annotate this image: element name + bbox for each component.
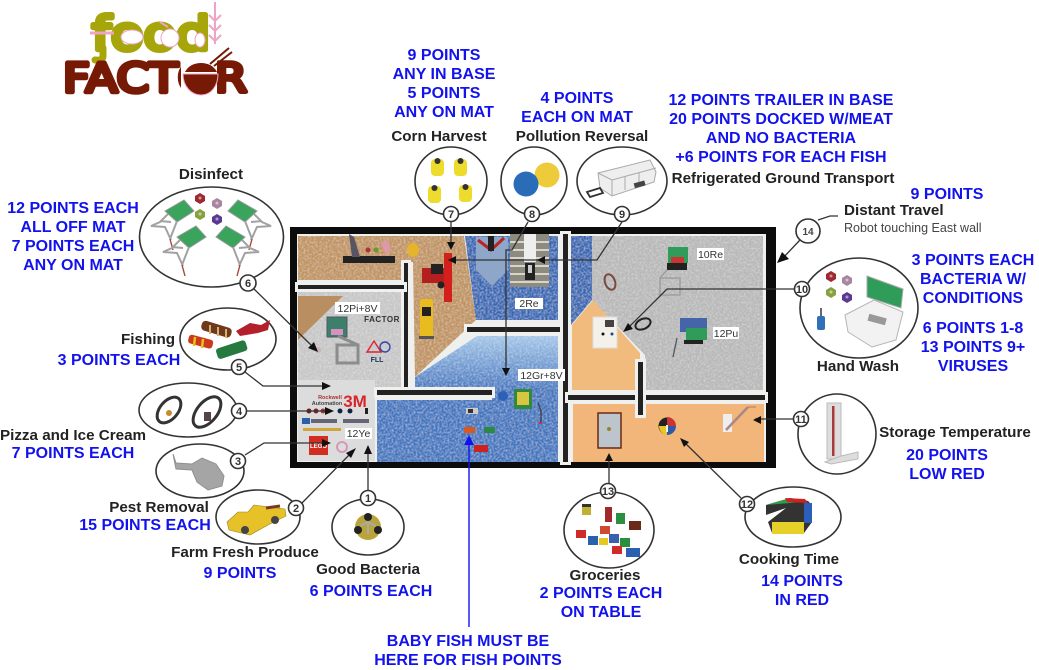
text: disinfect score: 12 POINTS EACH: [7, 200, 139, 217]
sponsor logos: LEGO: [310, 444, 327, 450]
callout 9: refrigerated ground transport: [577, 147, 667, 222]
text: hand wash score: 13 POINTS 9+: [921, 339, 1025, 356]
label: hand wash: Hand Wash: [817, 358, 899, 375]
yellow truck: [419, 299, 434, 339]
badge 11: 11: [795, 414, 807, 426]
callout 1: good bacteria: [332, 490, 404, 555]
rat figure: [173, 454, 224, 490]
field labels: 10Re: [698, 249, 723, 261]
badge 6: 6: [245, 278, 251, 290]
text: cooking score: IN RED: [775, 592, 829, 609]
sponsor logos: 3M: [343, 392, 367, 411]
callout 13: groceries: [564, 484, 654, 568]
callout 8: pollution reversal: [501, 147, 567, 222]
label: disinfect: Disinfect: [179, 166, 243, 183]
text: hand wash score: 6 POINTS 1-8: [923, 320, 1023, 337]
sponsor logos: Rockwell: [318, 395, 342, 401]
baby fish arrow: [464, 435, 474, 627]
badge 8: 8: [529, 209, 535, 221]
text: corn harvest score: ANY IN BASE: [393, 66, 496, 83]
zone: lower orange: [573, 404, 764, 462]
badge 5: 5: [236, 362, 242, 374]
callout 2: farm fresh produce: [216, 490, 304, 544]
label: groceries: Groceries: [570, 567, 640, 584]
text: corn harvest score: ANY ON MAT: [394, 104, 494, 121]
zone: grey base left: [298, 290, 403, 387]
text: cooking score: 14 POINTS: [761, 573, 843, 590]
callout 6: disinfect: [140, 187, 284, 291]
fish models: [187, 320, 270, 360]
cooking wheel: [658, 417, 676, 435]
logo decoration: f tail, fish, apple, wheat: [90, 2, 221, 60]
factor text and FLL logo: FLL: [371, 357, 384, 364]
note: distant travel condition: Robot touching East wall: [844, 221, 982, 235]
label: storage temperature: Storage Temperature: [879, 424, 1031, 441]
badge 13: 13: [602, 486, 614, 498]
field labels: 2Re: [519, 298, 539, 310]
callout 4: pizza and ice cream: [139, 383, 246, 437]
text: ground transport score: 12 POINTS TRAILER IN BASE: [669, 92, 894, 109]
text: ground transport score: +6 POINTS FOR EACH FISH: [675, 149, 887, 166]
field labels: 12Pi+8V: [338, 303, 378, 315]
logo bowl and chopsticks: [181, 48, 232, 96]
cooking wheel model: [766, 498, 812, 534]
text: disinfect score: 7 POINTS EACH: [12, 238, 134, 255]
label: good bacteria: Good Bacteria: [316, 561, 420, 578]
grocery pieces: [576, 504, 641, 557]
zone: grey right: [592, 236, 763, 390]
zone: sponsor panel: [298, 380, 375, 461]
label: pest removal: Pest Removal: [109, 499, 209, 516]
text: produce score: 9 POINTS: [204, 565, 277, 582]
callout 7: corn harvest: [415, 147, 487, 222]
zone: lower water: [377, 390, 558, 462]
corn pieces: [428, 158, 472, 203]
zone: right blue: [571, 236, 592, 325]
callout 14: distant travel: 14: [802, 227, 814, 238]
callout 12: cooking time: [740, 487, 841, 547]
badge 9: 9: [619, 209, 625, 221]
disinfect models: [151, 193, 271, 276]
field labels: 12Gr+8V: [520, 370, 563, 382]
red tractor: [422, 253, 452, 302]
badge 4: 4: [236, 406, 243, 418]
badge 3: 3: [235, 456, 241, 468]
text: disinfect score: ALL OFF MAT: [20, 219, 126, 236]
label: farm fresh produce: Farm Fresh Produce: [171, 544, 319, 561]
factor text and FLL logo: [364, 315, 400, 364]
storage temperature stick: [723, 407, 756, 432]
logo: Food Factor: [63, 2, 247, 102]
text: corn harvest score: 9 POINTS: [408, 47, 481, 64]
field labels: 12Ye: [347, 428, 370, 440]
text: fishing score: 3 POINTS EACH: [58, 352, 180, 369]
label: cooking time: Cooking Time: [739, 551, 839, 568]
text: storage score: 20 POINTS: [906, 447, 988, 464]
field walls: [298, 234, 765, 462]
label: distant travel: Distant Travel: [844, 202, 944, 219]
baby fish: [464, 408, 495, 452]
playing field map: [290, 227, 776, 468]
text: distant travel score: 9 POINTS: [911, 186, 984, 203]
field labels: 12Pu: [714, 328, 738, 340]
pizza and ice cream items: [306, 408, 368, 414]
pollution discs: [514, 162, 560, 196]
factor text and FLL logo: FACTOR: [364, 315, 400, 324]
sponsor logos: [302, 392, 369, 455]
text: baby fish note: HERE FOR FISH POINTS: [374, 652, 562, 669]
text: hand wash score: CONDITIONS: [923, 290, 1024, 307]
text: hand wash score: VIRUSES: [938, 358, 1008, 375]
callout 5: fishing: [180, 308, 276, 374]
arrowheads: [308, 242, 789, 461]
field models: [302, 234, 756, 455]
logo word: FACTOR: FACTOR: [63, 56, 247, 102]
badge 1: 1: [365, 493, 371, 505]
label: fishing: Fishing: [121, 331, 175, 348]
badge 10: 10: [796, 284, 808, 296]
zone: tan corner: [298, 296, 343, 340]
text: ground transport score: AND NO BACTERIA: [706, 130, 857, 147]
callout 11: storage temperature: [794, 394, 876, 474]
text: pollution reversal score: EACH ON MAT: [521, 109, 633, 126]
zone: upper water: [465, 236, 558, 320]
thermometer model: [825, 403, 858, 464]
dock: [510, 234, 549, 287]
text: corn harvest score: 5 POINTS: [408, 85, 481, 102]
text: baby fish note: BABY FISH MUST BE: [387, 633, 550, 650]
text: ground transport score: 20 POINTS DOCKED W/MEAT: [669, 111, 893, 128]
text: groceries score: 2 POINTS EACH: [540, 585, 662, 602]
callout 3: pest removal: [156, 444, 246, 498]
label: pollution reversal: Pollution Reversal: [516, 128, 648, 145]
base model left: [315, 317, 358, 363]
groceries table: [598, 413, 621, 448]
label: pizza and ice cream: Pizza and Ice Cream: [0, 427, 146, 444]
text: hand wash score: BACTERIA W/: [920, 271, 1027, 288]
text: groceries score: ON TABLE: [561, 604, 642, 621]
text: storage score: LOW RED: [909, 466, 985, 483]
label: refrigerated ground transport: Refrigerated Ground Transport: [672, 170, 894, 187]
shelf with animals: [343, 234, 395, 263]
bacteria model: [354, 513, 382, 540]
text: disinfect score: ANY ON MAT: [23, 257, 123, 274]
zone: light water: [415, 336, 558, 390]
zone: orange: [572, 300, 640, 390]
zone: tan farm: [298, 236, 476, 377]
yellow truck: [227, 505, 286, 535]
text: pollution reversal score: 4 POINTS: [541, 90, 614, 107]
badge 2: 2: [293, 503, 299, 515]
yellow egg: [407, 243, 419, 257]
badge 7: 7: [448, 209, 454, 221]
logo word: food: food: [92, 7, 210, 61]
callout 14: distant travel: [796, 219, 820, 243]
text: bacteria score: 6 POINTS EACH: [310, 583, 432, 600]
label: corn harvest: Corn Harvest: [391, 128, 487, 145]
callout 10: hand wash: [794, 258, 918, 358]
hand wash models: [593, 247, 707, 357]
sponsor logos: Automation: [312, 401, 343, 407]
leader lines and arrows: [245, 216, 838, 503]
text: pest score: 15 POINTS EACH: [79, 517, 211, 534]
text: pizza score: 7 POINTS EACH: [12, 445, 134, 462]
text: hand wash score: 3 POINTS EACH: [912, 252, 1034, 269]
hand wash model: [817, 271, 903, 347]
badge 6: [240, 275, 256, 291]
pizza rings: [152, 392, 226, 432]
trailer: [587, 160, 656, 197]
field labels: [335, 248, 739, 440]
boat: [476, 236, 508, 286]
ball and green model: [498, 389, 542, 423]
badge 12: 12: [741, 499, 753, 511]
